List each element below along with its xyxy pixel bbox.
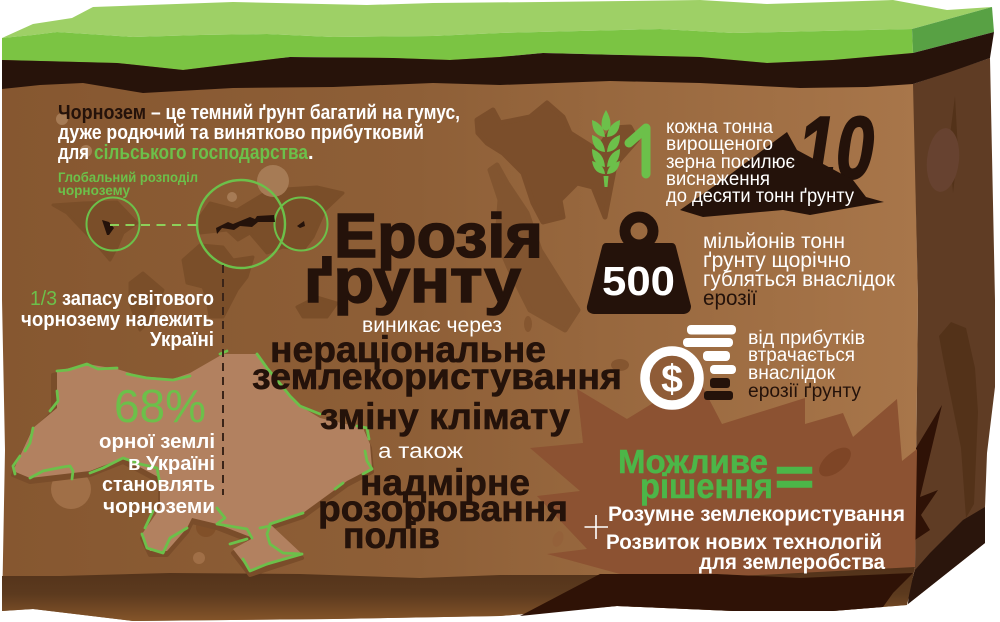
- grain statistic text: вирощеного: [666, 134, 773, 155]
- tonnes lost text: ґрунту щорічно: [703, 248, 851, 272]
- solution list: Розвиток нових технологій: [606, 531, 882, 554]
- main title: Ерозія: [334, 202, 543, 271]
- intro text: для: [58, 142, 89, 164]
- intro text: .: [308, 142, 314, 164]
- causes of erosion: а також: [378, 440, 463, 463]
- soil block right side face: [908, 58, 995, 604]
- icon: dollar coin stack: [645, 325, 736, 405]
- tonnes lost text: ерозії: [703, 286, 757, 310]
- tonnes lost text: мільйонів тонн: [703, 229, 845, 253]
- splash dark blotch: [814, 442, 856, 482]
- grain statistic text: до десяти тонн ґрунту: [666, 186, 854, 207]
- causes of erosion: нераціональне: [270, 329, 546, 370]
- profit loss text: внаслідок: [748, 363, 836, 384]
- global distribution map markers: [86, 180, 328, 268]
- dark bottom layer: [2, 567, 915, 621]
- causes of erosion: полів: [343, 515, 440, 556]
- 68 percent statistic: чорноземи: [103, 495, 215, 518]
- profit loss text: від прибутків: [748, 328, 865, 349]
- dashed connector line: [222, 265, 224, 495]
- one third statistic: чорнозему належить: [21, 309, 214, 331]
- icon: dollar coin stack: $: [661, 358, 683, 401]
- number one: [629, 128, 646, 174]
- map caption: чорнозему: [58, 182, 130, 198]
- intro text: сільського господарства: [94, 142, 309, 164]
- causes of erosion: виникає через: [362, 314, 502, 337]
- tonnes lost text: губляться внаслідок: [703, 267, 896, 291]
- 68 percent statistic: становлять: [102, 473, 215, 496]
- large map shapes behind text: [477, 103, 637, 330]
- plus sign: [584, 515, 608, 539]
- 68 percent statistic: в Україні: [128, 452, 215, 475]
- causes of erosion: надмірне: [360, 462, 530, 503]
- intro text: – це темний ґрунт багатий на гумус,: [151, 102, 460, 124]
- icon: wheat ear: [592, 110, 620, 187]
- intro text: Чорнозем: [58, 102, 146, 124]
- 68 percent statistic: 68%: [114, 380, 206, 432]
- solution list: Розумне землекористування: [608, 503, 905, 526]
- main title: ґрунту: [304, 247, 522, 316]
- intro text: дуже родючий та винятково прибутковий: [58, 122, 424, 144]
- possible solution heading: рішення: [640, 467, 773, 506]
- grain statistic text: виснаження: [666, 169, 770, 190]
- possible solution heading: Можливе: [618, 443, 768, 480]
- one third statistic: запасу світового: [62, 288, 214, 310]
- solution list: для землеробства: [699, 551, 885, 574]
- icon: weight with 500: 500: [602, 258, 675, 304]
- Ukraine map silhouette: [13, 351, 372, 575]
- map caption: Глобальний розподіл: [58, 169, 198, 185]
- profit loss text: втрачається: [748, 345, 855, 366]
- soil pile with number ten: 10: [798, 98, 874, 197]
- grain statistic text: зерна посилює: [666, 152, 795, 173]
- soil pile with number ten: [680, 98, 884, 217]
- orange splash behind solution: [530, 376, 917, 578]
- world map background: [53, 187, 343, 330]
- dark topsoil layer: [2, 32, 994, 93]
- grass top surface: [2, 0, 992, 38]
- causes of erosion: [252, 314, 622, 556]
- one third statistic: Україні: [150, 329, 214, 351]
- grass front band: [2, 29, 913, 70]
- causes of erosion: розорювання: [318, 488, 568, 529]
- one third statistic: 1/3: [30, 288, 57, 310]
- 68 percent statistic: орної землі: [99, 430, 215, 453]
- profit loss text: ерозії ґрунту: [748, 381, 861, 402]
- grass side face: [912, 7, 994, 53]
- 68 percent statistic: [99, 380, 221, 518]
- background soil blobs: [51, 113, 635, 564]
- grain statistic text: кожна тонна: [666, 117, 773, 138]
- possible solution heading: [618, 443, 812, 506]
- causes of erosion: землекористування: [252, 356, 622, 397]
- causes of erosion: зміну клімату: [320, 396, 570, 437]
- icon: weight with 500: [587, 217, 691, 314]
